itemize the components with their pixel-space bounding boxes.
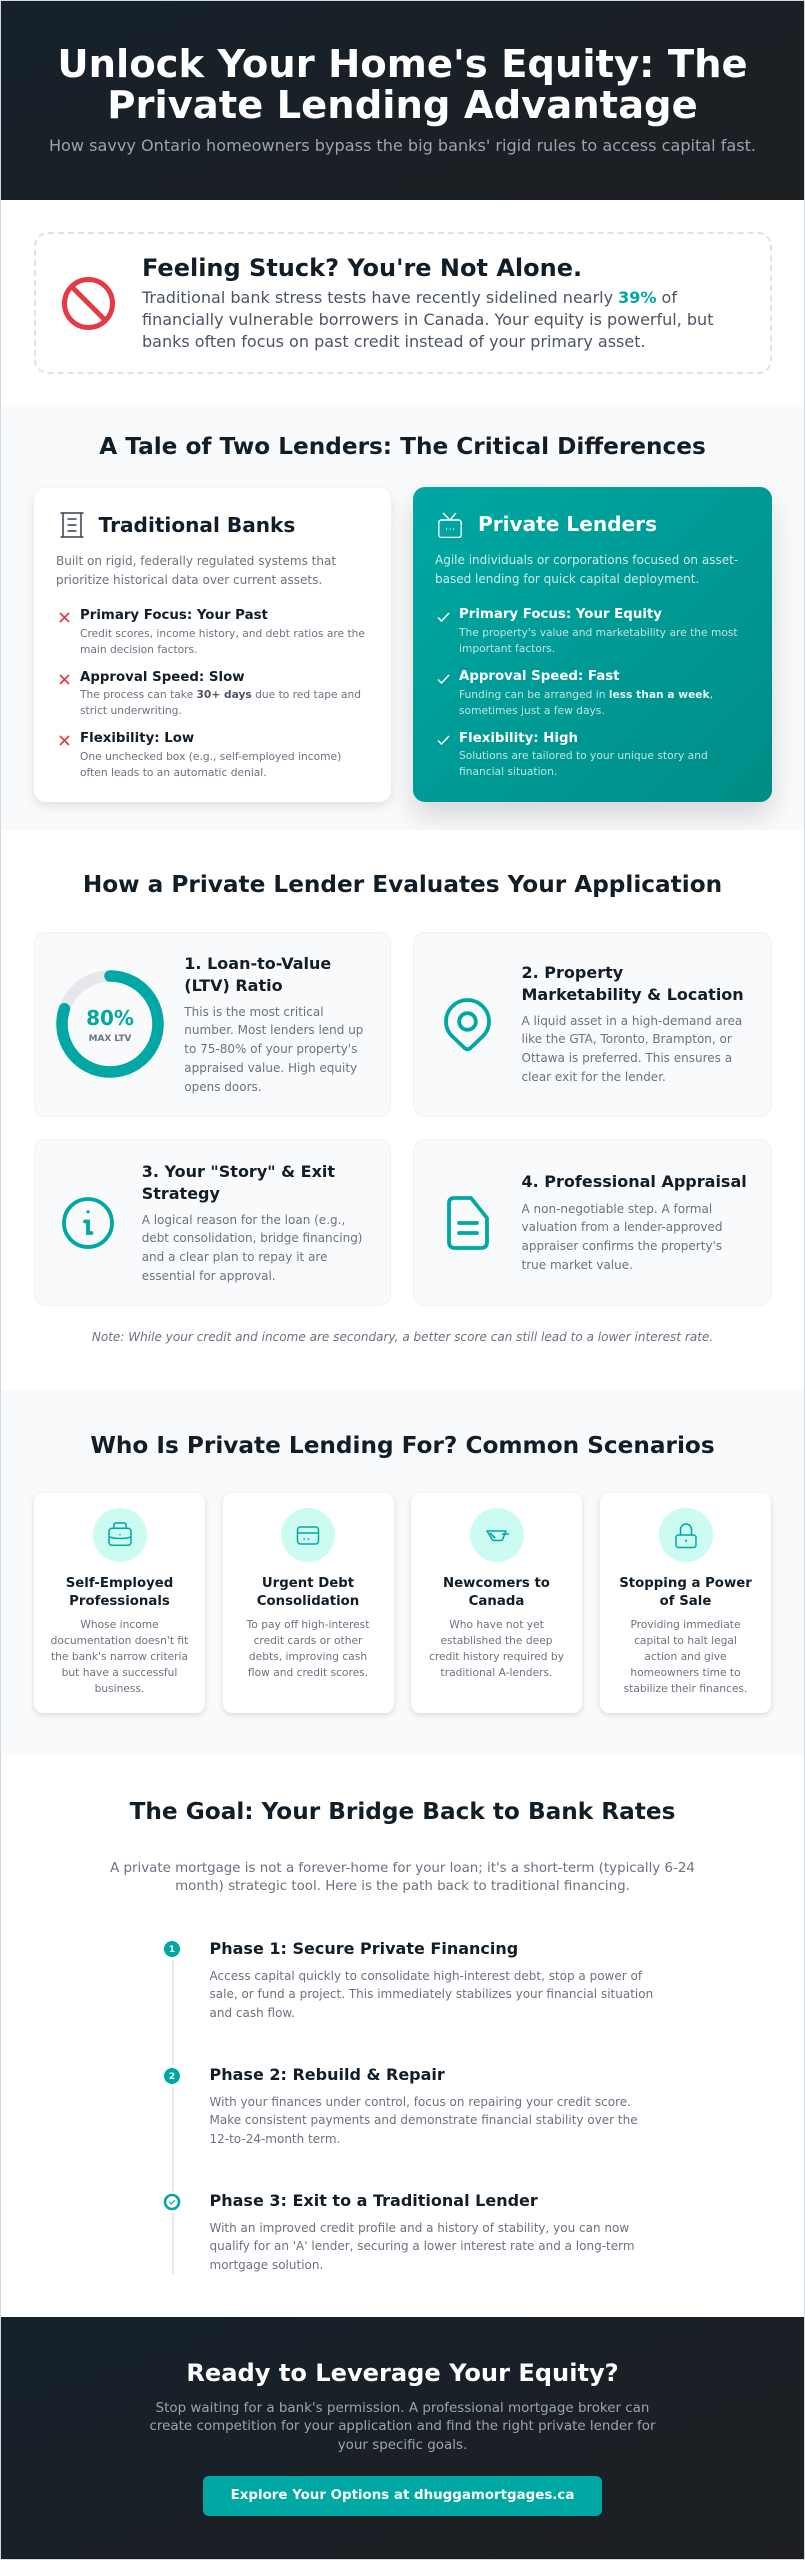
text block: Built on rigid, federally regulated systems that xyxy=(56,554,336,568)
list item: focus xyxy=(438,607,738,655)
card title xyxy=(600,1575,771,1612)
phase 1 xyxy=(160,1938,640,2038)
card text: like the GTA, Toronto, Brampton, or xyxy=(522,1032,732,1046)
card text: Providing immediate xyxy=(630,1618,741,1631)
item title: Approval Speed: Slow xyxy=(80,670,245,685)
chart: LTV donut: MAX LTV xyxy=(88,1034,131,1044)
card text: valuation from a lender-approved xyxy=(522,1220,722,1234)
text block: prioritize historical data over current assets. xyxy=(56,573,322,587)
section: call to action xyxy=(0,2317,805,2560)
card text: essential for approval. xyxy=(142,1269,276,1283)
subtitle: How savvy Ontario homeowners bypass the big banks' rigid rules to access capital fast. xyxy=(49,136,756,155)
card text: business. xyxy=(95,1682,144,1695)
item text xyxy=(80,750,341,779)
marker 1 xyxy=(160,1938,182,1960)
icon: cross xyxy=(60,735,70,746)
item text xyxy=(459,688,713,716)
note: Note: While your credit and income are secondary, a better score can still lead to a lower interest rate. xyxy=(92,1330,713,1344)
item text: often leads to an automatic denial. xyxy=(80,766,267,779)
card title: Consolidation xyxy=(257,1594,359,1609)
item title: Primary Focus: Your Equity xyxy=(459,607,662,622)
text block xyxy=(0,2400,805,2456)
card title xyxy=(411,1575,582,1612)
icon: cross xyxy=(60,674,70,685)
card text: the bank's narrow criteria xyxy=(51,1650,188,1663)
list item: speed xyxy=(438,669,713,716)
card text: established the deep xyxy=(440,1634,553,1647)
phase text: With an improved credit profile and a history of stability, you can now xyxy=(210,2221,629,2235)
item text: One unchecked box (e.g., self-employed income) xyxy=(80,750,341,763)
phase text: qualify for an 'A' lender, securing a lower interest rate and a long-term xyxy=(210,2239,635,2253)
phase text: 12-to-24-month term. xyxy=(210,2132,340,2146)
card text: but have a successful xyxy=(62,1666,177,1679)
text block: Stop waiting for a bank's permission. A professional mortgage broker can xyxy=(156,2401,649,2416)
marker 2: 2 xyxy=(168,2072,175,2082)
phase title: Phase 2: Rebuild & Repair xyxy=(210,2065,445,2084)
card heading: (LTV) Ratio xyxy=(184,976,283,995)
phase 2 xyxy=(160,2064,640,2164)
card text: credit history required by xyxy=(429,1650,564,1663)
item title: Flexibility: High xyxy=(459,731,578,746)
card text xyxy=(222,1617,394,1681)
title: Unlock Your Home's Equity: The xyxy=(57,42,748,86)
list item: speed xyxy=(60,670,361,717)
item text: main decision factors. xyxy=(80,642,197,656)
card text: A non-negotiable step. A formal xyxy=(522,1202,712,1216)
list item: flexibility xyxy=(438,731,708,778)
icon: cup xyxy=(470,1508,524,1562)
card text: to 75-80% of your property's xyxy=(184,1042,357,1056)
card text: Who have not yet xyxy=(449,1618,544,1631)
icon: lock xyxy=(658,1508,712,1562)
text block xyxy=(435,553,738,586)
intro text xyxy=(0,1860,805,1897)
icon: prohibited sign xyxy=(62,277,115,330)
card text: appraiser confirms the property's xyxy=(522,1239,722,1253)
item text xyxy=(458,626,738,655)
icon: bank building xyxy=(60,512,84,538)
card text xyxy=(522,1202,722,1272)
card heading: Strategy xyxy=(142,1184,220,1203)
intro text: A private mortgage is not a forever-home for your loan; it's a short-term (typically 6-24 xyxy=(110,1861,695,1876)
card title: Newcomers to xyxy=(443,1576,550,1591)
phase text: Make consistent payments and demonstrate financial stability over the xyxy=(210,2113,638,2127)
item title: Approval Speed: Fast xyxy=(459,669,620,684)
phase 3 xyxy=(160,2190,640,2290)
button: Explore Your Options at dhuggamortgages.ca xyxy=(231,2488,574,2503)
marker 1: 1 xyxy=(168,1945,175,1955)
panel: private lenders xyxy=(413,487,772,802)
card text xyxy=(522,1014,742,1084)
panel: story xyxy=(34,1139,391,1306)
heading: How a Private Lender Evaluates Your Application xyxy=(83,871,722,898)
heading: Feeling Stuck? You're Not Alone. xyxy=(142,254,582,282)
text block: your specific goals. xyxy=(338,2438,467,2453)
card text: action and give xyxy=(644,1650,727,1663)
card text: clear exit for the lender. xyxy=(522,1070,666,1084)
card text xyxy=(411,1617,582,1681)
item text: The process can take 30+ days due to red tape and xyxy=(80,688,361,701)
heading: Private Lenders xyxy=(478,512,657,536)
phase text: and cash flow. xyxy=(210,2006,295,2020)
card title: Urgent Debt xyxy=(262,1576,354,1591)
card text: Ottawa is preferred. This ensures a xyxy=(522,1051,732,1065)
intro text: month) strategic tool. Here is the path back to traditional financing. xyxy=(175,1879,630,1894)
card text: opens doors. xyxy=(184,1080,262,1094)
chart: LTV donut xyxy=(56,970,164,1078)
phase text xyxy=(210,2219,635,2275)
item text: important factors. xyxy=(459,642,555,655)
icon: check xyxy=(438,612,450,622)
card heading: 3. Your "Story" & Exit xyxy=(142,1162,335,1181)
card heading: 4. Professional Appraisal xyxy=(522,1172,747,1191)
text block: banks often focus on past credit instead of your primary asset. xyxy=(142,332,646,351)
card text xyxy=(184,1005,363,1094)
panel: LTV xyxy=(34,932,391,1117)
card text: debts, improving cash xyxy=(249,1650,367,1663)
card text xyxy=(51,1618,188,1695)
card text: capital to halt legal xyxy=(634,1634,737,1647)
section: problem xyxy=(0,200,805,407)
card text: homeowners time to xyxy=(630,1666,741,1679)
text block: Traditional bank stress tests have recently sidelined nearly 39% of xyxy=(142,288,677,307)
card: debt consolidation xyxy=(222,1493,394,1713)
phase title: Phase 3: Exit to a Traditional Lender xyxy=(210,2191,538,2210)
card: self-employed xyxy=(34,1493,205,1713)
section: comparison xyxy=(0,407,805,830)
icon: check xyxy=(438,674,450,684)
card text: appraised value. High equity xyxy=(184,1061,357,1075)
heading: The Goal: Your Bridge Back to Bank Rates xyxy=(130,1798,675,1825)
heading: Ready to Leverage Your Equity? xyxy=(186,2359,619,2387)
item text: Solutions are tailored to your unique story and xyxy=(459,749,708,762)
text block xyxy=(142,288,714,351)
button xyxy=(203,2476,602,2516)
panel: feeling stuck callout xyxy=(34,232,772,374)
icon: briefcase xyxy=(93,1508,147,1562)
card heading xyxy=(142,1162,335,1203)
title xyxy=(57,42,748,128)
item title: Primary Focus: Your Past xyxy=(80,608,268,623)
card text xyxy=(142,1213,362,1283)
list item: focus xyxy=(60,608,365,656)
card text: A logical reason for the loan (e.g., xyxy=(142,1213,345,1227)
phase text xyxy=(210,1967,653,2023)
phase text: mortgage solution. xyxy=(210,2258,323,2272)
panel: appraisal xyxy=(413,1139,772,1306)
text block: financially vulnerable borrowers in Canada. Your equity is powerful, but xyxy=(142,310,713,329)
text block: based lending for quick capital deployment. xyxy=(435,572,699,586)
title: Private Lending Advantage xyxy=(107,83,698,128)
phase text: sale, or fund a project. This immediately stabilizes your financial situation xyxy=(210,1987,653,2001)
card text xyxy=(600,1617,771,1697)
item text xyxy=(80,688,361,717)
marker 3 xyxy=(160,2191,182,2213)
section: goal timeline xyxy=(0,1756,805,2317)
text block: Agile individuals or corporations focused on asset- xyxy=(435,553,738,567)
card heading xyxy=(522,963,744,1004)
heading: A Tale of Two Lenders: The Critical Differences xyxy=(99,433,706,460)
card text: debt consolidation, bridge financing) xyxy=(142,1231,362,1245)
icon: check xyxy=(438,736,450,745)
card text: stabilize their finances. xyxy=(624,1682,747,1695)
item text: Credit scores, income history, and debt ratios are the xyxy=(80,626,365,640)
list item: flexibility xyxy=(60,731,341,779)
header xyxy=(0,0,805,200)
text block xyxy=(56,554,336,587)
card title: Canada xyxy=(469,1594,524,1609)
card text: To pay off high-interest xyxy=(247,1618,369,1631)
section: evaluation criteria xyxy=(0,830,805,1390)
panel: traditional banks xyxy=(34,488,391,802)
card text: flow and credit scores. xyxy=(248,1666,368,1679)
card text: traditional A-lenders. xyxy=(441,1666,552,1679)
item text xyxy=(80,626,365,656)
icon: credit card xyxy=(281,1508,335,1562)
panel: marketability xyxy=(413,932,772,1117)
card title: Professionals xyxy=(69,1594,170,1609)
heading: Traditional Banks xyxy=(99,513,295,537)
item text: financial situation. xyxy=(459,765,557,778)
icon: cross xyxy=(60,612,70,623)
phase text: Access capital quickly to consolidate high-interest debt, stop a power of xyxy=(210,1969,642,1983)
card heading xyxy=(184,954,331,995)
card heading: 1. Loan-to-Value xyxy=(184,954,331,973)
card: power of sale xyxy=(600,1493,771,1713)
icon: map pin xyxy=(444,998,491,1052)
card text: number. Most lenders lend up xyxy=(184,1023,363,1037)
icon: tv xyxy=(438,512,462,538)
heading: Who Is Private Lending For? Common Scenarios xyxy=(90,1432,715,1459)
card title: of Sale xyxy=(660,1594,711,1609)
icon: document xyxy=(447,1196,489,1250)
item text: sometimes just a few days. xyxy=(459,704,605,716)
phase title: Phase 1: Secure Private Financing xyxy=(210,1939,518,1958)
item text: strict underwriting. xyxy=(80,704,182,717)
item text: Funding can be arranged in less than a week, xyxy=(459,688,713,700)
marker 2 xyxy=(160,2065,182,2087)
card: newcomers xyxy=(411,1493,582,1713)
item title: Flexibility: Low xyxy=(80,731,194,746)
item text: The property's value and marketability are the most xyxy=(459,626,738,639)
section: scenarios xyxy=(0,1390,805,1756)
card text: Whose income xyxy=(80,1618,159,1631)
text block: create competition for your application and find the right private lender for xyxy=(150,2419,655,2434)
card text: and a clear plan to repay it are xyxy=(142,1250,327,1264)
card title: Self-Employed xyxy=(66,1576,173,1591)
card text: A liquid asset in a high-demand area xyxy=(522,1014,742,1028)
phase text: With your finances under control, focus on repairing your credit score. xyxy=(210,2095,631,2109)
card heading: 2. Property xyxy=(522,963,623,982)
phase text xyxy=(210,2093,638,2149)
card text: true market value. xyxy=(522,1258,633,1272)
card title xyxy=(222,1575,394,1612)
card text: This is the most critical xyxy=(184,1005,324,1019)
item text xyxy=(459,749,708,778)
card text: credit cards or other xyxy=(254,1634,362,1647)
card title xyxy=(66,1576,173,1609)
icon: info xyxy=(62,1197,114,1249)
card title: Stopping a Power xyxy=(619,1576,752,1591)
card text: documentation doesn't fit xyxy=(51,1634,188,1647)
card heading: Marketability & Location xyxy=(522,985,744,1004)
chart: LTV donut: 80% xyxy=(86,1005,133,1029)
